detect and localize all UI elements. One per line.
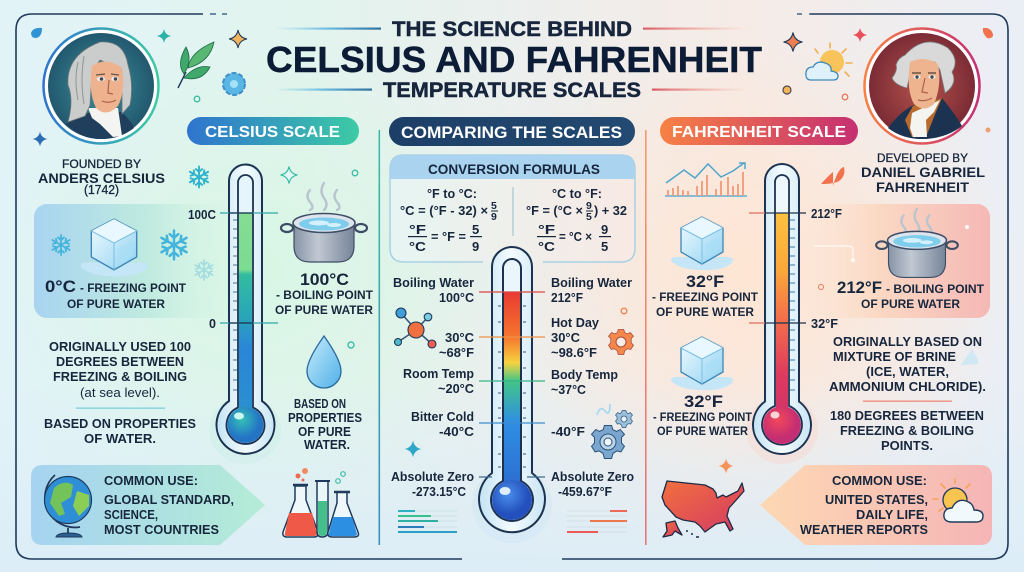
text: freezing point lower Fahrenheit: - FREEZING POINT [653,410,753,424]
labels: Celsius comparison values: ~20°C [438,381,475,396]
text: Celsius history: OF WATER. [84,431,156,446]
icon: laboratory flasks [283,468,358,537]
text: boiling point Celsius [275,270,374,317]
text: Celsius history: (at sea level). [80,385,160,400]
formula: Celsius to Fahrenheit: ) + 32 [594,203,627,218]
labels: Fahrenheit comparison values: 30°C [551,330,581,345]
panel: boiling point Fahrenheit [800,204,990,318]
portrait: Anders Celsius [44,28,158,144]
formula: Fahrenheit to Celsius: 9 [491,211,497,223]
decorative icons: top right [783,28,993,186]
thermometer: Fahrenheit: 212°F [811,206,842,221]
text: freezing point lower Fahrenheit [653,392,753,438]
labels: Celsius comparison values: 100°C [439,290,475,305]
pill: Fahrenheit scale: FAHRENHEIT SCALE [672,124,846,141]
formula: Celsius to Fahrenheit: 9 [586,200,592,212]
text: Celsius history: BASED ON PROPERTIES [44,416,196,431]
title: CELSIUS AND FAHRENHEIT [266,39,762,80]
icon: snowflakes [51,230,214,280]
icon: trend chart [665,163,747,196]
title [266,18,762,102]
text: Fahrenheit history: (ICE, WATER, [866,364,949,379]
text: freezing label [45,277,187,311]
text: based on properties: OF PURE [298,424,351,439]
text: founder Fahrenheit [861,153,985,195]
text: Fahrenheit history: FREEZING & BOILING [840,423,974,438]
formula: Fahrenheit to Celsius: °F [409,222,426,237]
text: freezing label: - FREEZING POINT [80,281,187,295]
icon: boiling pot [876,209,958,277]
text: boiling label [837,278,984,311]
labels: Celsius comparison values: -40°C [439,424,475,439]
icon: sun and cloud [933,479,983,522]
text: Fahrenheit history: AMMONIUM CHLORIDE). [829,379,986,394]
formula: Celsius to Fahrenheit: 5 [586,211,592,223]
pill: Celsius scale [187,117,359,145]
labels: Fahrenheit comparison values: Absolute Zero [551,469,634,484]
text: founder Celsius: FOUNDED BY [62,159,141,171]
pill: comparing the scales: COMPARING THE SCALES [401,123,622,142]
text: freezing point upper Fahrenheit: OF PURE WATER [656,305,754,319]
formula: Celsius to Fahrenheit: 9 [601,222,608,237]
text: common use: SCIENCE, [104,507,158,522]
labels: Celsius comparison values: Bitter Cold [411,409,474,424]
title: TEMPERATURE SCALES [383,79,641,102]
text: Celsius history [44,339,196,446]
icon: boiling pot Celsius [281,183,367,262]
labels: Celsius comparison values: Room Temp [403,366,474,381]
formula: Fahrenheit to Celsius: °F to °C: [427,186,477,201]
text: Fahrenheit history: 180 DEGREES BETWEEN [830,408,984,423]
text: Fahrenheit history: MIXTURE OF BRINE [833,349,956,364]
icons: gears and accents [404,308,634,458]
labels: Fahrenheit comparison values [551,275,634,499]
text: founder Celsius: (1742) [84,183,119,197]
text: based on properties: PROPERTIES [288,410,362,425]
labels: Celsius comparison values: -273.15°C [412,484,467,499]
labels: Celsius comparison values: 30°C [445,330,475,345]
text: Fahrenheit history: POINTS. [881,438,933,453]
title: THE SCIENCE BEHIND [392,18,632,41]
decorative: sparkle and ring [280,166,358,184]
labels: Celsius comparison values: ~68°F [439,345,474,360]
text: boiling label: 212°F [837,278,882,297]
text: common use [800,473,928,537]
pill: comparing the scales [389,117,635,146]
labels: Fahrenheit comparison values: -459.67°F [558,484,612,499]
labels: Fahrenheit comparison values: -40°F [551,424,585,439]
labels: Fahrenheit comparison values: 212°F [551,290,583,305]
text: Celsius history: DEGREES BETWEEN [56,354,184,369]
text: freezing label: OF PURE WATER [67,297,165,311]
decorative data lines: right [567,511,627,532]
thermometer: Fahrenheit [746,164,842,464]
text: common use [104,473,234,537]
panel: common use Celsius [31,465,265,545]
formula: Fahrenheit to Celsius [400,186,498,254]
text: based on properties: BASED ON [294,396,346,411]
panel: conversion formulas: CONVERSION FORMULAS [428,162,600,177]
icon: ice cube [81,219,147,277]
text: freezing point upper Fahrenheit [652,272,759,319]
icon: molecule [394,308,436,348]
thermometer: Celsius [188,164,281,464]
text: founder Fahrenheit: DANIEL GABRIEL [861,164,985,180]
text: based on properties [288,396,362,452]
text: boiling label: - BOILING POINT [886,284,984,296]
panel: conversion formulas [390,155,635,262]
formula: Fahrenheit to Celsius: 9 [472,239,479,254]
icon: snowflake above panel [188,166,210,188]
text: founder Fahrenheit: FAHRENHEIT [876,179,969,195]
labels: Celsius comparison values: Boiling Water [393,275,474,290]
text: freezing label: 0°C [45,277,76,296]
text: freezing point lower Fahrenheit: OF PURE WATER [657,424,748,438]
formula: Fahrenheit to Celsius: 5 [491,200,497,212]
decorative icons: top left [31,28,247,146]
icon: sparkle near map [718,458,734,474]
text: Fahrenheit history: ORIGINALLY BASED ON [833,334,982,349]
formula: Celsius to Fahrenheit: °C to °F: [552,186,602,201]
text: freezing point upper Fahrenheit: - FREEZING POINT [652,290,759,304]
column dividers [378,130,647,545]
pill: Fahrenheit scale [660,117,858,145]
icon: sun and cloud top [806,43,852,80]
icon: ice cube upper Fahrenheit [671,217,733,270]
formula: Celsius to Fahrenheit: °C [538,239,556,254]
text: founder Celsius [38,159,165,197]
text: freezing point lower Fahrenheit: 32°F [684,392,723,411]
text: common use: WEATHER REPORTS [800,522,928,537]
text: based on properties: WATER. [304,437,350,452]
text: founder Celsius: ANDERS CELSIUS [38,170,165,186]
portrait: Daniel Gabriel Fahrenheit [864,28,980,144]
formula: Celsius to Fahrenheit [526,186,627,254]
text: common use: COMMON USE: [104,473,198,488]
formula: Celsius to Fahrenheit: °F = (°C × [526,203,583,218]
decorative data lines: left [398,511,457,532]
icon: map of the United States [662,481,744,537]
labels: Fahrenheit comparison values: ~98.6°F [551,345,597,360]
text: Fahrenheit history [829,334,986,453]
text: boiling point Celsius: 100°C [300,270,349,289]
text: founder Fahrenheit: DEVELOPED BY [877,153,968,165]
text: boiling label: OF PURE WATER [861,297,960,311]
formula: Celsius to Fahrenheit: 5 [601,239,608,254]
formula: Fahrenheit to Celsius: 5 [472,222,479,237]
text: Celsius history: ORIGINALLY USED 100 [49,339,191,354]
formula: Fahrenheit to Celsius: °C [409,239,427,254]
text: common use: MOST COUNTRIES [104,522,219,537]
thermometer: Celsius: 100C [188,208,216,222]
formula: Fahrenheit to Celsius: °C = (°F - 32) × [400,203,488,218]
text: common use: UNITED STATES, [825,492,928,507]
labels: Fahrenheit comparison values: Boiling Water [551,275,632,290]
text: common use: DAILY LIFE, [856,507,928,522]
pill: Celsius scale: CELSIUS SCALE [205,124,340,141]
formula: Celsius to Fahrenheit: °F [538,222,555,237]
labels: Fahrenheit comparison values: Body Temp [551,367,618,382]
text: Celsius history: FREEZING & BOILING [53,369,187,384]
text: boiling point Celsius: OF PURE WATER [275,303,373,317]
icon: globe [44,475,92,537]
text: freezing point upper Fahrenheit: 32°F [686,272,724,291]
formula: Celsius to Fahrenheit: = °C × [559,229,592,244]
labels: Fahrenheit comparison values: ~37°C [551,382,587,397]
formula: Fahrenheit to Celsius: = °F = [431,229,466,244]
labels: Celsius comparison values [391,275,475,499]
icon: ice cube lower Fahrenheit [671,337,733,390]
thermometer: Fahrenheit: 32°F [811,316,838,331]
labels: Fahrenheit comparison values: Hot Day [551,315,600,330]
thermometer: Celsius: 0 [209,317,216,331]
panel: common use Fahrenheit [760,465,992,545]
text: common use: GLOBAL STANDARD, [104,492,234,507]
icon: water drop [307,336,354,388]
panel: freezing point Celsius [34,204,239,318]
text: boiling point Celsius: - BOILING POINT [276,288,374,302]
text: common use: COMMON USE: [832,473,927,488]
thermometer: comparison [472,247,552,543]
labels: Celsius comparison values: Absolute Zero [391,469,474,484]
